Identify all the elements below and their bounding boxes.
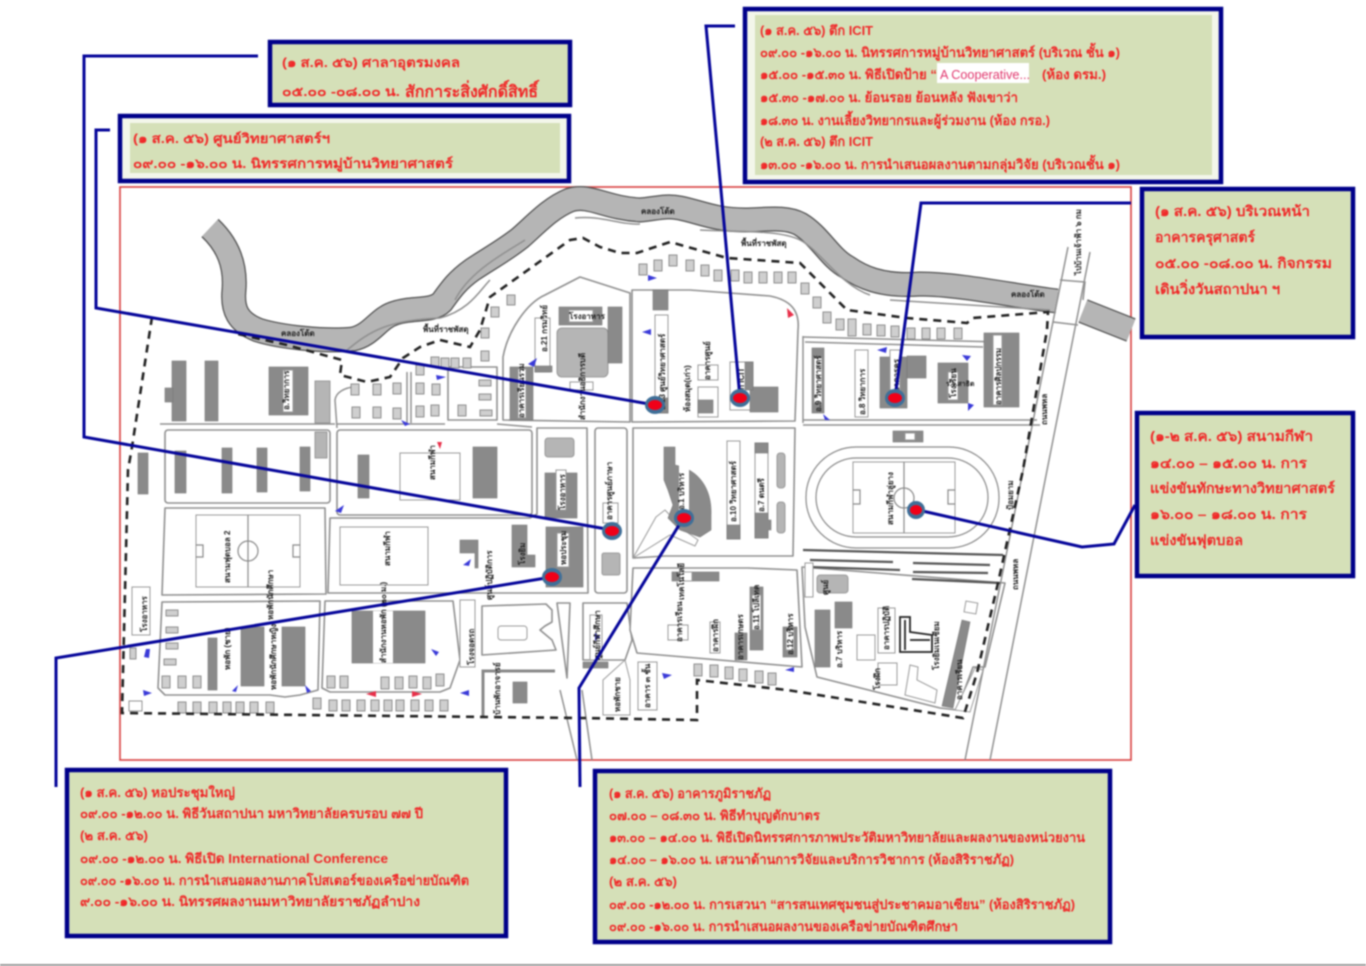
- panel: Uttaramongkhon pavilion: ๐๕.๐๐ -๐๘.๐๐ น.: [282, 84, 400, 99]
- map labels: โรงเรียน: [948, 368, 958, 399]
- map labels: สนามกีฬา: [382, 531, 392, 566]
- map labels: พื้นที่ราชพัสดุ: [423, 323, 469, 335]
- panel: Phumirajabhat building: ๐๙.๐๐ -๑๒.๐๐ น. การเสวนา “สารสนเทศชุมชนสู่ประชาคมอาเซียน” (ห้องสิริราชภัฏ): [609, 897, 1075, 913]
- panel: Faculty of Education front area: เดินวิ่งวันสถาปนา ฯ: [1155, 279, 1280, 297]
- panel: Uttaramongkhon pavilion: [270, 42, 570, 105]
- map labels: ศูนย์กีฬาศึกษา: [592, 610, 603, 660]
- map labels: บ้านพักอาจารย์: [492, 662, 502, 715]
- map labels: สนามกีฬาลู่ยาง: [885, 472, 896, 525]
- map labels: ร.ร.สาธิต: [946, 380, 975, 388]
- panel: Phumirajabhat building: (๑ ส.ค. ๕๖) อาคารภูมิราชภัฏ: [609, 786, 771, 802]
- panel: main auditorium: ๙.๐๐ -๑๖.๐๐ น. นิทรรศผลงานมหาวิทยาลัยราชภัฏลำปาง: [80, 894, 420, 910]
- map labels: หอพักชาย: [613, 677, 622, 712]
- panel: Science Center: [120, 116, 569, 181]
- map labels: ป้อมยาม: [1005, 480, 1015, 510]
- map labels: อาคารเกษตร: [736, 614, 745, 660]
- panel: Faculty of Education front area: ๐๕.๐๐ -๐๘.๐๐ น. กิจกรรม: [1155, 255, 1332, 271]
- map labels: โรงอาหาร: [139, 595, 149, 633]
- campus boundary dashed line: [122, 238, 1048, 720]
- map labels: คลองโต้ด: [1011, 289, 1045, 299]
- panel: Science Center: ๐๙.๐๐ -๑๖.๐๐ น. นิทรรศการหมู่บ้านวิทยาศาสตร์: [133, 156, 453, 172]
- panel: stadium schedule: [1137, 413, 1353, 576]
- panel: Phumirajabhat building: ๐๙.๐๐ -๑๖.๐๐ น. การนำเสนอผลงานของเครือข่ายบัณฑิตศึกษา: [609, 919, 958, 934]
- map labels: อาคารศิลปกรรม: [994, 348, 1003, 405]
- map labels: อ.7 ดนตรี: [756, 477, 766, 512]
- panel: ICIT building: [745, 9, 1221, 182]
- map labels: ถนนพหล: [1040, 394, 1049, 425]
- buildings: [132, 290, 1019, 718]
- panel: Faculty of Education front area: (๑ ส.ค. ๕๖) บริเวณหน้า: [1155, 203, 1310, 219]
- panel: ICIT building: ๑๘.๓๐ น. งานเลี้ยงวิทยากรและผู้ร่วมงาน (ห้อง กรอ.): [760, 110, 1050, 129]
- panel: Phumirajabhat building: [595, 771, 1110, 942]
- map labels: หอพัก (ชาย): [223, 627, 232, 670]
- panel: ICIT building: (๒ ส.ค. ๕๖) ตึก ICIT: [760, 134, 873, 149]
- football field: [196, 515, 300, 587]
- panel: ICIT building: A Cooperative...: [940, 67, 1030, 82]
- map labels: อ.9 วิทยาศาสตร์: [813, 355, 823, 412]
- map labels: ศูนย์ปฏิบัติการ: [484, 550, 495, 600]
- panel: Faculty of Education front area: อาคารครุศาสตร์: [1155, 229, 1255, 246]
- panel: ICIT building: ๑๕.๐๐ -๑๕.๓๐ น. พิธีเปิดป้าย “: [760, 67, 937, 82]
- sports ground: [340, 527, 428, 585]
- map labels: โรงฝึก: [872, 668, 882, 691]
- panel: ICIT building: ๑๕.๓๐ -๑๗.๐๐ น. ย้อนรอย ย้อนหลัง ฟังเขาว่า: [760, 90, 1018, 105]
- panel: Uttaramongkhon pavilion: (๑ ส.ค. ๕๖) ศาลาอุตรมงคล: [282, 55, 460, 71]
- panel: main auditorium: (๒ ส.ค. ๕๖): [80, 828, 148, 843]
- panel: main auditorium: ๐๙.๐๐ -๑๒.๐๐ น. พิธีวันสถาปนา มหาวิทยาลัยครบรอบ ๗๗ ปี: [80, 806, 423, 821]
- map labels: ตึก ICIT: [737, 368, 746, 395]
- panel: stadium schedule: แข่งขันทักษะทางวิทยาศาสตร์: [1150, 480, 1335, 496]
- map labels: อ.13 ศูนย์วิทยาศาสตร์: [657, 333, 668, 410]
- panel: stadium schedule: ๑๖.๐๐ – ๑๘.๐๐ น. การ: [1150, 506, 1308, 522]
- map labels: สนามฟุตบอล 2: [223, 530, 233, 583]
- map labels: อ.11 โปลีเทค: [751, 585, 761, 630]
- map labels: โรงยิมเนเซียม: [931, 621, 941, 671]
- map labels: อาคารฝึก: [711, 619, 720, 652]
- map labels: คลองโต้ด: [281, 328, 315, 338]
- map labels: สำนักงานอธิการบดี: [577, 353, 587, 420]
- map labels: อาคารครุ: [892, 358, 902, 392]
- road blocks: [158, 217, 1090, 760]
- panel: ICIT building: (ห้อง ดรม.): [1042, 67, 1106, 82]
- panel: Phumirajabhat building: ๐๗.๐๐ – ๐๘.๓๐ น. พิธีทำบุญตักบาตร: [609, 808, 820, 824]
- map labels: โรงยิม: [517, 543, 527, 566]
- river: [210, 199, 1131, 340]
- location markers: [542, 389, 925, 586]
- bottom rule: [0, 964, 1366, 966]
- panel: Phumirajabhat building: ๑๓.๐๐ – ๑๔.๐๐ น. พิธีเปิดนิทรรศการภาพประวัติมหาวิทยาลัยและผลงานของหน่วยงาน: [609, 830, 1085, 845]
- panel: Faculty of Education front area: [1142, 189, 1353, 337]
- map labels: หอพักนักศึกษา: [266, 570, 275, 620]
- red direction arrows: [366, 308, 794, 697]
- direction arrows: [143, 275, 974, 696]
- map labels: ศูนย์: [820, 579, 831, 595]
- map labels: อ.10 วิทยาศาสตร์: [728, 460, 738, 522]
- map labels: อาคารเรียนรวม: [516, 363, 526, 418]
- panel: ICIT building: ๐๙.๐๐ -๑๖.๐๐ น. นิทรรศการหมู่บ้านวิทยาศาสตร์ (บริเวณ ชั้น ๑): [760, 42, 1120, 61]
- map labels: คลองโต้ด: [641, 206, 675, 216]
- map labels: โรงจอดรถ: [466, 629, 476, 666]
- connector lines: [56, 26, 1135, 787]
- map labels: โรงอาหาร: [557, 473, 567, 511]
- map labels: อาคาร ๓ ชั้น: [641, 663, 652, 708]
- map labels: สำนักงานหอพัก (๒๐ ม.): [379, 581, 388, 663]
- map labels: พื้นที่ราชพัสดุ: [741, 237, 787, 249]
- map labels: ถนนพหล: [1011, 559, 1020, 590]
- map labels: อาคารศูนย์: [702, 341, 713, 380]
- panel: main auditorium: ๐๙.๐๐ -๑๖.๐๐ น. การนำเสนอผลงานภาคโปสเตอร์ของเครือข่ายบัณฑิต: [80, 872, 469, 888]
- map labels: ห้องสมุด(เก่า): [682, 365, 693, 412]
- map labels: อ.21 กรมวิทย์: [539, 305, 549, 352]
- map frame: [120, 187, 1131, 760]
- map labels: อาคารศูนย์ภาษา: [604, 462, 615, 520]
- map labels: อ.7 บริหาร: [835, 630, 844, 668]
- map labels: อ.8 วิทยาการ: [858, 368, 867, 415]
- map labels: อาคารเรียน: [954, 659, 964, 700]
- panel: Phumirajabhat building: (๒ ส.ค. ๕๖): [609, 874, 677, 889]
- map labels: สนามกีฬา: [427, 445, 437, 480]
- map labels: อ.12 บริหาร: [786, 613, 795, 655]
- map labels: อ.1 บริหาร: [677, 472, 686, 510]
- panel: ICIT building: (๑ ส.ค. ๕๖) ตึก ICIT: [760, 23, 873, 38]
- panel: main auditorium: ๐๙.๐๐ -๑๒.๐๐ น. พิธีเปิด International Conference: [80, 851, 388, 866]
- panel: stadium schedule: แข่งขันฟุตบอล: [1150, 532, 1243, 549]
- map labels: ไปบ้านเจ้าฟ้า ๖ กม: [1073, 209, 1083, 276]
- panel: main auditorium: (๑ ส.ค. ๕๖) หอประชุมใหญ่: [80, 784, 235, 801]
- map labels: [139, 206, 1083, 715]
- map labels: หอพักนักศึกษาหญิง: [269, 624, 279, 690]
- stadium: [806, 447, 999, 548]
- map labels: อาคารเรียน: [674, 601, 684, 642]
- panel: main auditorium: [67, 770, 506, 936]
- panel: stadium schedule: ๑๔.๐๐ – ๑๕.๐๐ น. การ: [1150, 455, 1308, 471]
- map labels: อาคารปฏิบัติ: [882, 606, 891, 650]
- panel: stadium schedule: (๑-๒ ส.ค. ๕๖) สนามกีฬา: [1150, 428, 1313, 444]
- map labels: อ.วิทยาการ: [282, 370, 291, 410]
- hatched ground: [400, 453, 460, 500]
- map labels: เทคโนโลยี: [676, 563, 686, 600]
- panel: ICIT building: ๑๓.๐๐ -๑๖.๐๐ น. การนำเสนอผลงานตามกลุ่มวิจัย (บริเวณชั้น ๑): [760, 154, 1120, 173]
- panel: Science Center: (๑ ส.ค. ๕๖) ศูนย์วิทยาศาสตร์ฯ: [133, 131, 330, 147]
- small houses: [129, 255, 962, 713]
- panel: Uttaramongkhon pavilion: สักการะสิ่งศักดิ์สิทธิ์: [405, 80, 540, 101]
- panel: Phumirajabhat building: ๑๔.๐๐ – ๑๖.๐๐ น. เสวนาด้านการวิจัยและบริการวิชาการ (ห้องสิริราชภัฏ): [609, 852, 1014, 868]
- map labels: หอประชุม: [559, 531, 569, 565]
- map labels: โรงอาหาร: [568, 311, 606, 321]
- panel: campus map: [120, 187, 1131, 760]
